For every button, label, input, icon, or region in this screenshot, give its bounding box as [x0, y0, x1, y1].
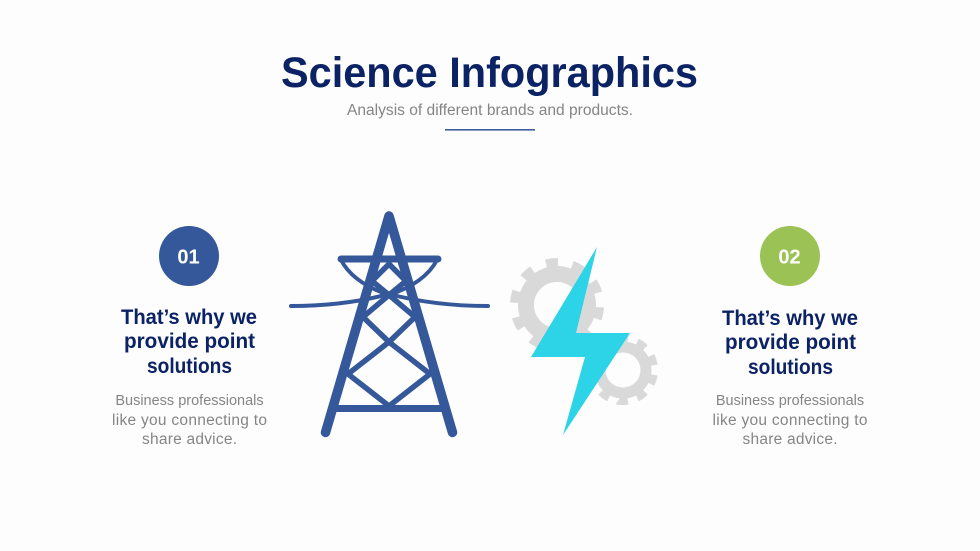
- panel: item 02: [712, 226, 868, 448]
- body text 01: [112, 393, 267, 448]
- icon: lightning bolt: [531, 247, 630, 435]
- heading 02: [722, 307, 858, 379]
- body text 02: like you connecting to: [712, 412, 868, 429]
- body text 01: like you connecting to: [112, 412, 267, 429]
- heading 01: [121, 306, 257, 378]
- icon: transmission tower: [291, 216, 488, 432]
- body text 01: Business professionals: [115, 393, 264, 409]
- number badge 02: [760, 226, 820, 286]
- heading 01: That’s why we: [121, 306, 257, 329]
- heading 01: provide point: [124, 330, 255, 353]
- body text 02: Business professionals: [716, 393, 864, 409]
- heading 01: solutions: [147, 355, 232, 378]
- heading 02: That’s why we: [722, 307, 858, 330]
- body text 02: [712, 393, 868, 448]
- number badge 01: 01: [177, 246, 200, 268]
- heading 02: provide point: [725, 331, 856, 354]
- number badge 02: 02: [778, 246, 801, 268]
- icon: large gear: [512, 260, 602, 350]
- body text 02: share advice.: [742, 431, 838, 448]
- heading 02: solutions: [748, 356, 833, 379]
- number badge 01: [159, 226, 219, 286]
- body text 01: share advice.: [142, 431, 237, 448]
- subtitle: Analysis of different brands and products.: [347, 102, 633, 119]
- title: Science Infographics: [281, 49, 698, 97]
- icon: gears and lightning bolt: [512, 247, 658, 435]
- icon: small gear: [588, 335, 658, 405]
- panel: item 01: [112, 226, 267, 448]
